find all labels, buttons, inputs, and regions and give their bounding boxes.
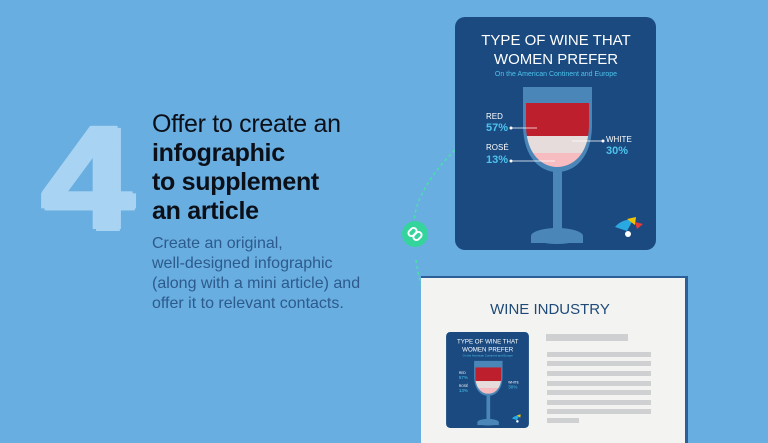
placeholder text lines <box>546 334 651 423</box>
mini wine card: On the American Continent and Europe <box>463 353 513 357</box>
panel: article document <box>421 276 688 443</box>
mini wine card: 30% <box>508 384 517 389</box>
panel: wine card: WHITE <box>606 135 632 144</box>
heading: to supplement <box>152 168 319 196</box>
panel: wine card: WOMEN PREFER <box>494 51 618 68</box>
mini wine card: TYPE OF WINE THAT <box>457 339 519 346</box>
icon: link <box>402 221 428 247</box>
panel: wine card: ROSÉ <box>486 143 509 152</box>
panel: wine card: 57% <box>486 122 508 134</box>
mini wine card: WHITE <box>508 381 520 385</box>
heading <box>152 110 341 225</box>
panel: wine card: RED <box>486 112 503 121</box>
mini wine card <box>446 332 529 428</box>
heading: infographic <box>152 139 285 167</box>
heading: Offer to create an <box>152 110 341 138</box>
body text: Create an original, <box>152 235 283 252</box>
panel: wine card: On the American Continent and Europe <box>495 71 617 78</box>
body text: (along with a mini article) and <box>152 275 360 292</box>
heading: an article <box>152 197 259 225</box>
mini wine card: 13% <box>459 388 468 393</box>
arrow: dashed connectors <box>414 150 455 286</box>
mini wine card: RED <box>459 371 466 375</box>
body text: offer it to relevant contacts. <box>152 295 344 312</box>
big number 4: 4 <box>42 97 134 261</box>
mini wine card: ROSÉ <box>459 383 469 388</box>
body text <box>152 235 360 312</box>
mini wine card: WOMEN PREFER <box>462 346 514 353</box>
body text: well-designed infographic <box>152 255 333 272</box>
panel: wine card: TYPE OF WINE THAT <box>481 32 631 49</box>
panel: wine card: 13% <box>486 154 508 166</box>
document title: WINE INDUSTRY <box>490 301 610 318</box>
panel: wine card <box>455 17 656 250</box>
panel: wine card: 30% <box>606 145 628 157</box>
mini wine card: 57% <box>459 375 468 380</box>
